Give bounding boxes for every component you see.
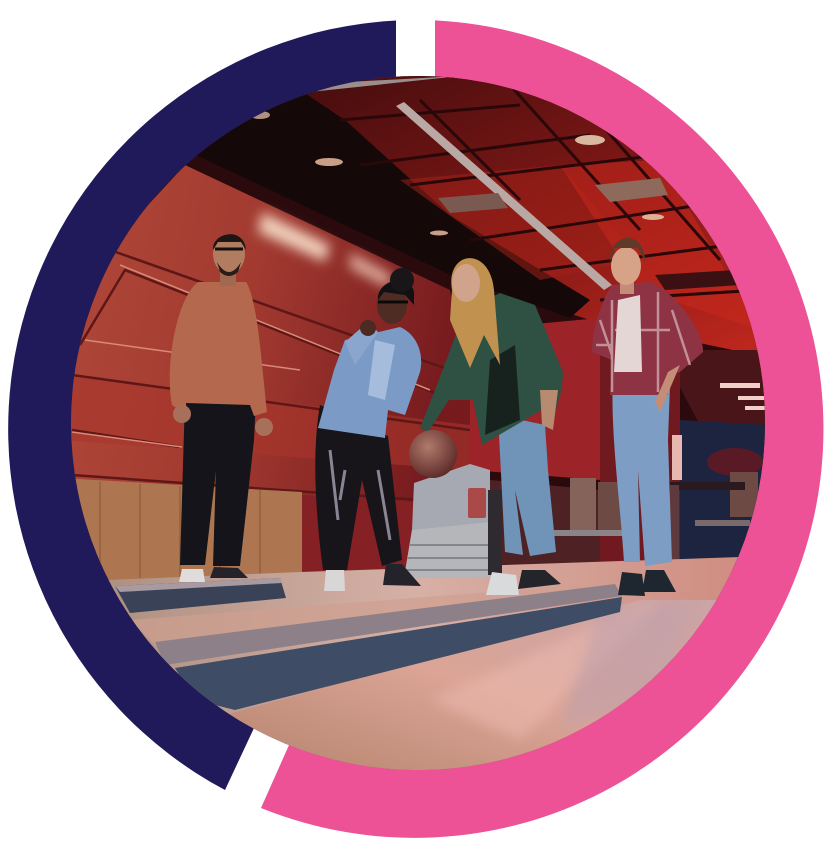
floor (108, 557, 738, 770)
bowling lane (132, 592, 716, 770)
ball return machine (404, 464, 502, 578)
plaid shirt (592, 282, 703, 395)
navy ring arc (8, 20, 396, 790)
jeans (498, 415, 556, 556)
bowling ball (409, 430, 457, 478)
ceiling (185, 76, 780, 425)
shoes (324, 570, 345, 591)
pants (180, 398, 256, 566)
person 2: pointing person in denim shirt (315, 268, 421, 591)
person 3: blonde woman bending (420, 258, 563, 595)
person 1: man in sweater (170, 234, 273, 582)
person 4: woman in plaid shirt (592, 238, 703, 596)
wall: red side wall (60, 165, 478, 582)
pink ring arc (261, 20, 823, 838)
head (220, 272, 236, 286)
lane gutter (115, 578, 622, 710)
head and hair (450, 258, 500, 368)
head (377, 292, 407, 324)
back area: far wall and tables (470, 318, 770, 570)
shoes (618, 572, 645, 596)
white top (614, 295, 642, 372)
forearm (655, 365, 680, 412)
hands (173, 405, 191, 423)
pointing arm (345, 328, 378, 364)
shoes (486, 572, 519, 595)
shoes (179, 569, 205, 582)
denim shirt (318, 327, 421, 438)
sweater (170, 282, 267, 416)
jeans (612, 376, 672, 566)
arm reaching ball (420, 384, 449, 431)
photo circle (60, 70, 780, 790)
green shirt (437, 293, 563, 445)
black pants (315, 405, 402, 570)
head (620, 282, 634, 294)
